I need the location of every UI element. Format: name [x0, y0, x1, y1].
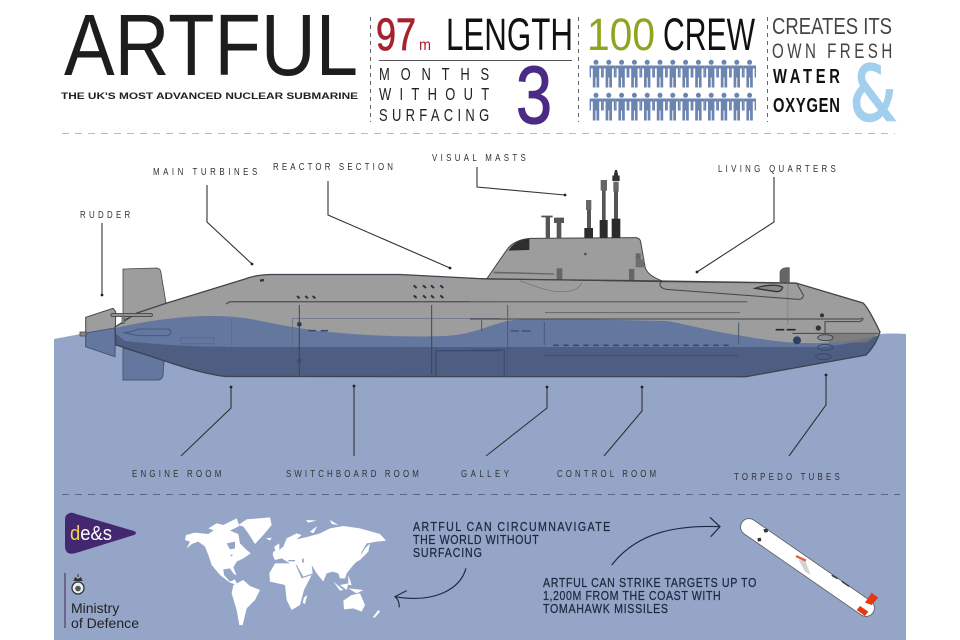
stat: months without surfacing: MONTHS [379, 65, 489, 85]
stat: water and oxygen: CREATES ITS [772, 13, 892, 39]
icon: tomahawk missile [749, 527, 878, 616]
stat: length [376, 9, 573, 60]
logo: de&s [65, 513, 136, 554]
subtitle: THE UK'S MOST ADVANCED NUCLEAR SUBMARINE [61, 91, 358, 102]
stat: water and oxygen: WATER [773, 65, 840, 88]
arrow: to world map [395, 568, 466, 607]
text: tomahawk: ARTFUL CAN STRIKE TARGETS UP TO [543, 576, 756, 590]
logo: ministry of defence [65, 573, 139, 631]
stat: months without surfacing: 3 [516, 50, 552, 141]
stat: water and oxygen: OWN FRESH [772, 38, 892, 63]
stat: months without surfacing [379, 50, 552, 141]
stat: water and oxygen [772, 13, 896, 138]
logo: ministry of defence: of Defence [71, 615, 139, 631]
label: switchboard room: SWITCHBOARD ROOM [286, 468, 419, 479]
masts [541, 170, 620, 238]
label: switchboard room [286, 385, 419, 479]
label: visual masts [432, 152, 566, 196]
aft hull details [111, 280, 500, 376]
label: main turbines: MAIN TURBINES [153, 166, 257, 177]
conning tower [487, 170, 662, 283]
text: circumnavigate: ARTFUL CAN CIRCUMNAVIGATE [413, 520, 610, 534]
submarine [80, 170, 900, 390]
stat: length: LENGTH [446, 9, 573, 60]
hull [116, 275, 880, 376]
tail fins [80, 268, 166, 380]
stat: crew [587, 9, 755, 60]
arrow: to missile [612, 517, 720, 565]
text: tomahawk [543, 576, 756, 616]
label: control room: CONTROL ROOM [557, 468, 656, 479]
logo: ministry of defence: Ministry [71, 600, 119, 616]
stat: months without surfacing: SURFACING [379, 106, 489, 126]
stat: water and oxygen: OXYGEN [773, 94, 840, 117]
label: living quarters [696, 163, 836, 273]
label: engine room: ENGINE ROOM [132, 468, 221, 479]
text: circumnavigate [413, 520, 610, 560]
label: reactor section: REACTOR SECTION [273, 161, 393, 172]
stat: months without surfacing: WITHOUT [379, 85, 490, 105]
label: reactor section [273, 161, 451, 269]
label: torpedo tubes: TORPEDO TUBES [734, 471, 840, 482]
text: tomahawk: 1,200M FROM THE COAST WITH [543, 589, 721, 603]
label: galley: GALLEY [461, 468, 509, 479]
stat: water and oxygen: & [850, 49, 896, 138]
label: visual masts: VISUAL MASTS [432, 152, 526, 163]
label: galley [461, 386, 548, 479]
forward hull details [470, 268, 878, 377]
label: control room [557, 386, 656, 479]
label: torpedo tubes [734, 374, 840, 482]
icon: crew people rows [590, 60, 756, 120]
stat: crew: 100 [587, 9, 655, 60]
stat: crew: CREW [663, 9, 755, 60]
label: living quarters: LIVING QUARTERS [718, 163, 836, 174]
label: rudder [80, 209, 131, 296]
stat: length: m [419, 37, 431, 54]
label: engine room [132, 386, 232, 479]
text: tomahawk: TOMAHAWK MISSILES [543, 602, 668, 616]
label: rudder: RUDDER [80, 209, 131, 220]
stat: length: 97 [376, 9, 416, 60]
logo: de&s: de&s [70, 523, 112, 545]
text: circumnavigate: THE WORLD WITHOUT [413, 533, 539, 547]
text: circumnavigate: SURFACING [413, 546, 482, 560]
world map [185, 517, 386, 625]
label: main turbines [153, 166, 257, 265]
water background [54, 327, 906, 640]
